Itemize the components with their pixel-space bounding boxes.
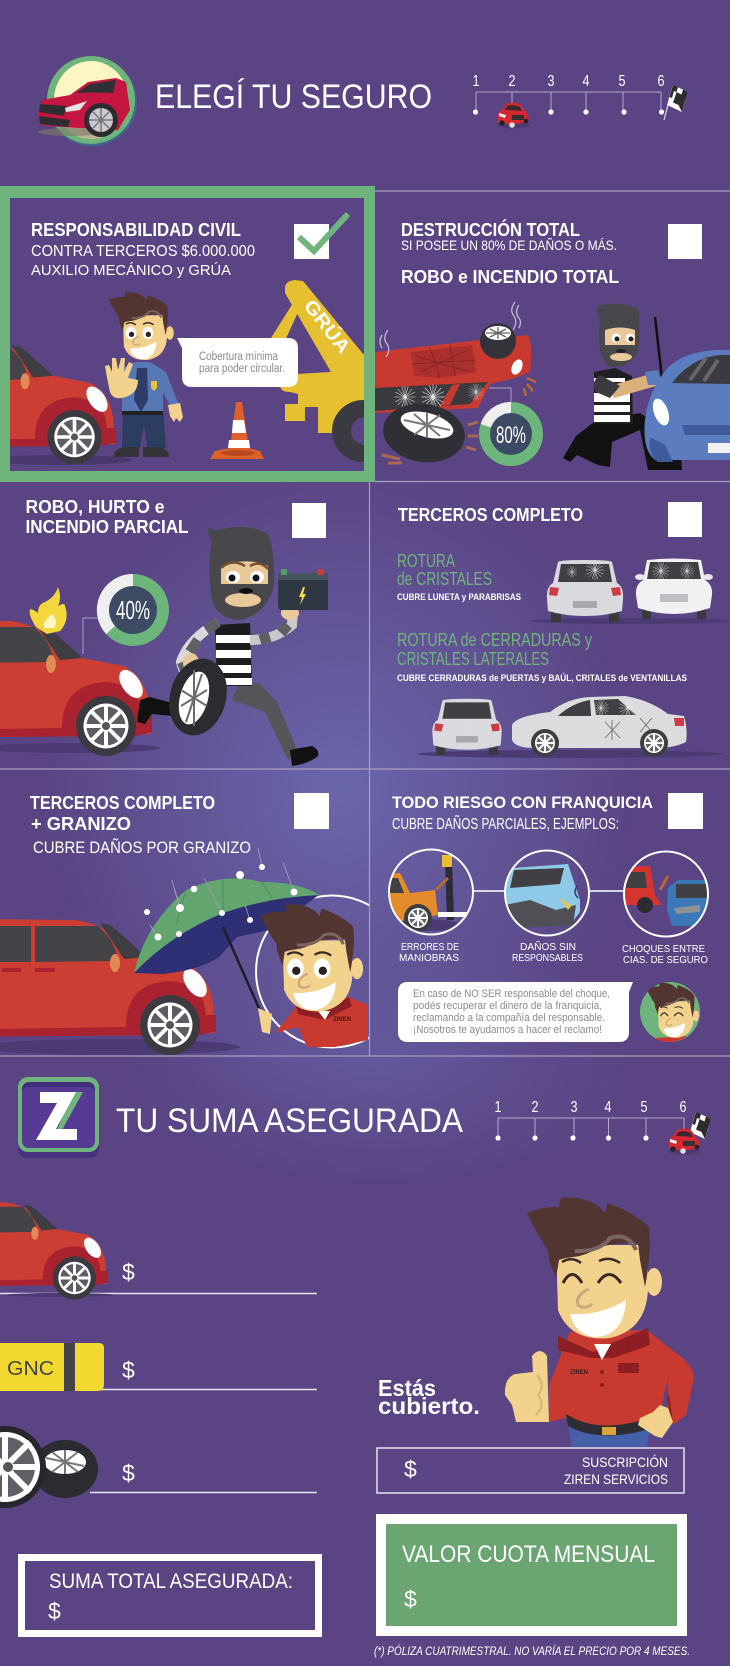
illustration: overturned car <box>375 302 536 413</box>
illustration: cars with broken glass <box>530 558 730 624</box>
icon: damage without responsible <box>505 850 589 936</box>
illustration: police officer <box>105 292 183 457</box>
illustration: smiling agent: ZIREN <box>333 1017 351 1023</box>
progress stepper, step 6: 2 <box>532 1099 539 1116</box>
progress stepper, step 2: 2 <box>508 73 516 90</box>
caption: cubre luneta: CUBRE LUNETA y PARABRISAS <box>397 592 521 602</box>
chart: 40% donut: 40% <box>116 595 150 625</box>
icon: collision between insurers <box>624 852 709 936</box>
box: suscripción ziren servicios <box>377 1448 684 1493</box>
illustration: tow truck: GRÚA <box>299 296 355 358</box>
progress stepper, step 2: 5 <box>618 73 626 90</box>
illustration: thief running with battery and tyre <box>137 527 318 766</box>
text: cubre daños parciales: CUBRE DAÑOS PARCIALES, EJEMPLOS: <box>392 816 619 833</box>
callout: minimum coverage: Cobertura mínima <box>199 351 279 363</box>
section header: tu suma asegurada <box>18 1077 711 1158</box>
amount row: GNC plate: $ <box>122 1357 135 1383</box>
progress stepper, step 6: 4 <box>604 1099 612 1116</box>
progress stepper, step 2: 4 <box>582 73 590 90</box>
box: suscripción ziren servicios: SUSCRIPCIÓN <box>582 1454 668 1470</box>
text: estás cubierto: Estás <box>378 1375 436 1401</box>
callout: minimum coverage: para poder circular. <box>199 363 285 375</box>
caption: errores de maniobras: MANIOBRAS <box>399 952 459 964</box>
amount row: tyres <box>0 1426 317 1508</box>
icon: Z logo <box>18 1077 99 1158</box>
icon: red car badge <box>38 56 137 146</box>
total box: suma total asegurada <box>22 1558 318 1634</box>
progress stepper, step 2 <box>472 73 688 128</box>
amount row: car value <box>0 1202 317 1300</box>
callout: franquicia recovery: En caso de NO SER responsable del choque, <box>413 988 610 1000</box>
progress stepper, step 6: 6 <box>680 1099 687 1116</box>
checkbox <box>668 502 702 537</box>
text: estás cubierto <box>378 1375 480 1419</box>
heading: destrucción total: DESTRUCCIÓN TOTAL <box>401 219 580 240</box>
box: valor cuota mensual <box>376 1514 687 1636</box>
callout: franquicia recovery: ¡Nosotros te ayudamos a hacer el reclamo! <box>413 1024 602 1036</box>
callout: franquicia recovery: podés recuperar el dinero de la franquicia, <box>413 1000 602 1012</box>
box: valor cuota mensual: $ <box>404 1586 417 1612</box>
heading <box>30 793 215 834</box>
chart: 80% donut: 80% <box>496 422 526 449</box>
heading: robo, hurto: ROBO, HURTO e <box>26 497 164 517</box>
icon: smiling agent <box>640 982 700 1045</box>
checkbox <box>294 793 329 829</box>
heading: incendio parcial: INCENDIO PARCIAL <box>26 517 189 537</box>
title: ELEGÍ TU SEGURO <box>155 78 432 116</box>
header: elegí tu seguro <box>38 56 688 146</box>
text: estás cubierto: cubierto. <box>378 1393 480 1419</box>
total box: suma total asegurada: SUMA TOTAL ASEGURADA: <box>49 1570 293 1593</box>
total box: suma total asegurada: $ <box>48 1598 61 1624</box>
illustration: red car <box>0 620 160 756</box>
illustration: rear and side car with damage <box>417 696 723 758</box>
amount row: car value: $ <box>122 1259 135 1285</box>
panel: destrucción total / robo e incendio total <box>375 219 730 470</box>
caption: errores de maniobras <box>399 941 459 964</box>
caption: errores de maniobras: ERRORES DE <box>401 941 459 953</box>
panel: responsabilidad civil (selected) <box>0 186 394 482</box>
text: si posee un 80%: SI POSEE UN 80% DE DAÑOS O MÁS. <box>401 237 617 253</box>
progress stepper, step 2: 6 <box>658 73 665 90</box>
title: TU SUMA ASEGURADA <box>116 1102 463 1140</box>
heading: + GRANIZO <box>31 814 131 834</box>
chart: 40% donut <box>83 574 169 654</box>
panel: robo, hurto e incendio parcial <box>0 497 328 766</box>
icon: fire <box>30 587 67 634</box>
caption: daños sin responsables <box>512 940 583 964</box>
caption: cubre cerraduras: CUBRE CERRADURAS de PUERTAS y BAÚL, CRITALES de VENTANILLAS <box>397 672 687 683</box>
subheading: rotura de cristales: de CRISTALES <box>397 569 492 589</box>
callout: franquicia recovery <box>398 982 633 1042</box>
subheading: rotura de cristales: ROTURA <box>397 551 455 571</box>
heading: robo e incendio total: ROBO e INCENDIO TOTAL <box>401 267 619 287</box>
text: cubre daños por granizo: CUBRE DAÑOS POR GRANIZO <box>33 838 251 857</box>
progress stepper, step 6: 1 <box>494 1099 502 1116</box>
progress stepper, step 6: 3 <box>570 1099 578 1116</box>
amount row: GNC plate: GNC <box>7 1358 54 1380</box>
heading: responsabilidad civil: RESPONSABILIDAD CIVIL <box>31 220 241 240</box>
callout: minimum coverage <box>177 338 298 387</box>
caption: daños sin responsables: DAÑOS SIN <box>520 940 576 953</box>
progress stepper, step 2: 3 <box>548 73 555 90</box>
box: valor cuota mensual: VALOR CUOTA MENSUAL <box>402 1541 655 1568</box>
illustration: traffic cone <box>210 402 264 459</box>
icon: car battery <box>278 569 328 610</box>
heading: TODO RIESGO CON FRANQUICIA <box>392 793 653 812</box>
progress stepper, step 2: 1 <box>472 73 480 90</box>
checkbox <box>668 224 702 259</box>
checkbox with green check <box>294 214 348 259</box>
subheading: rotura de cerraduras: CRISTALES LATERALES <box>397 649 549 669</box>
box: suscripción ziren servicios: ZIREN SERVICIOS <box>564 1471 668 1487</box>
heading: TERCEROS COMPLETO <box>30 793 215 813</box>
illustration: smiling agent thumbs up: ZIREN <box>570 1370 588 1376</box>
illustration: red car <box>10 345 132 465</box>
panel: terceros completo + granizo <box>0 793 408 1055</box>
panel: terceros completo <box>397 502 730 758</box>
illustration: red car <box>0 919 240 1055</box>
illustration: green umbrella with hail <box>134 848 319 1034</box>
illustration: smiling agent thumbs up <box>505 1198 694 1447</box>
callout: franquicia recovery: reclamando a la compañía del responsable. <box>413 1012 605 1024</box>
subheading: rotura de cerraduras <box>397 630 592 669</box>
illustration: tow truck <box>271 280 364 462</box>
amount row: GNC plate <box>0 1343 317 1391</box>
text: contra terceros: CONTRA TERCEROS $6.000.000 <box>31 243 255 260</box>
box: suscripción ziren servicios: $ <box>404 1456 417 1482</box>
checkbox <box>668 793 703 829</box>
amount row: tyres: $ <box>122 1460 135 1486</box>
icon: maneuver error <box>389 850 473 934</box>
progress stepper, step 6 <box>494 1099 711 1154</box>
progress stepper, step 6: 5 <box>640 1099 648 1116</box>
text: auxilio mecánico: AUXILIO MECÁNICO y GRÚA <box>31 262 231 279</box>
subheading: rotura de cristales <box>397 551 492 589</box>
caption: choques entre cías: CHOQUES ENTRE <box>622 943 705 955</box>
caption: choques entre cías <box>622 943 708 966</box>
dividers <box>0 191 730 1056</box>
heading: TERCEROS COMPLETO <box>398 505 583 525</box>
caption: choques entre cías: CIAS. DE SEGURO <box>623 954 708 966</box>
illustration: thief at blue car <box>563 304 730 470</box>
illustration: loose tyre <box>379 399 478 467</box>
illustration: smiling agent <box>261 904 368 1047</box>
caption: daños sin responsables: RESPONSABLES <box>512 952 583 964</box>
checkbox <box>292 503 326 538</box>
illustration: white circle outline <box>255 894 369 1048</box>
chart: 80% donut <box>479 388 543 466</box>
subheading: rotura de cerraduras: ROTURA de CERRADURAS y <box>397 630 592 650</box>
panel: todo riesgo con franquicia <box>389 793 709 1045</box>
